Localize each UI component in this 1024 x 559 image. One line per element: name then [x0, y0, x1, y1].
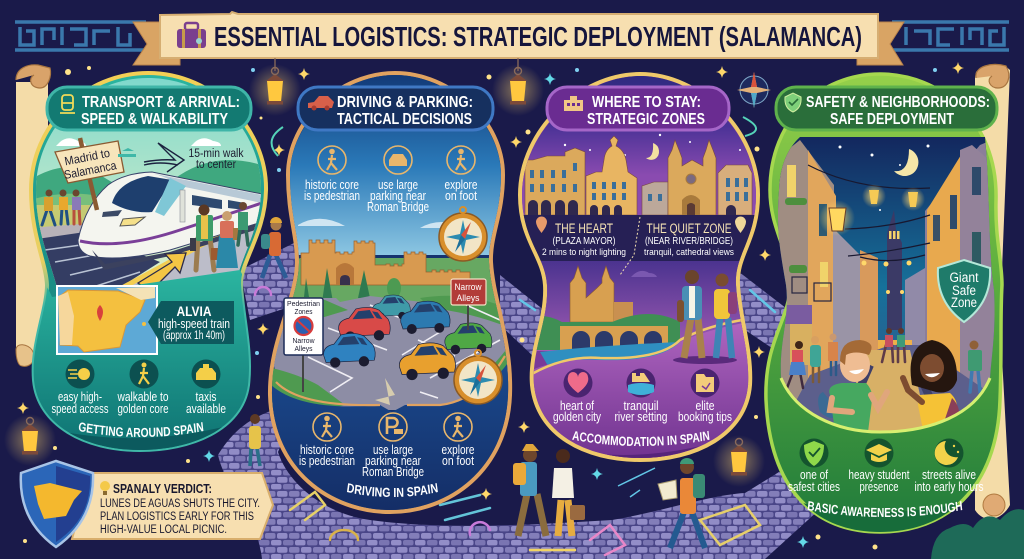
arrow and walk time [118, 143, 244, 172]
benefit labels: river setting [614, 410, 668, 424]
benefit labels: tranquil [624, 399, 658, 413]
illustration: train at station [36, 78, 261, 285]
bottom labels: historic core [300, 443, 354, 457]
sign: Pedestrian Zones: Zones [294, 309, 313, 316]
top icons [318, 146, 475, 174]
small cathedral [570, 266, 614, 322]
icon: moon and stars [934, 438, 964, 468]
icon: compass bottom [454, 350, 502, 404]
callout: Spanaly verdict [21, 461, 273, 547]
cobblestone road [218, 240, 830, 559]
benefit labels: golden city [553, 410, 602, 424]
sign: Pedestrian Zones: Narrow [292, 338, 315, 345]
verdict text: PLAN LOGISTICS EARLY FOR THIS [100, 511, 254, 523]
sign: Narrow Alleys [451, 279, 486, 330]
signpost: Madrid to Salamanca: Madrid to [63, 146, 111, 168]
arrow and walk time: to center [196, 159, 236, 171]
panel: transport and arrival [29, 71, 268, 452]
badge: Giant Safe Zone: Safe [952, 283, 976, 298]
illustration: night street [775, 137, 1000, 440]
badge: Giant Safe Zone: Giant [950, 270, 979, 285]
benefit labels: heavy student [848, 468, 910, 482]
caption: Accommodation in Spain: ACCOMMODATION IN SPAIN [572, 430, 710, 446]
caption: Getting around Spain: GETTING AROUND SPAIN [78, 422, 204, 438]
header: transport [47, 87, 251, 130]
sign: Pedestrian Zones: Pedestrian [287, 301, 320, 308]
icon: graduation cap [864, 438, 894, 468]
bottom labels [299, 443, 475, 479]
header: safety [776, 87, 997, 130]
signpost: Madrid to Salamanca [55, 138, 124, 210]
benefit labels [788, 468, 984, 494]
bush corner [931, 509, 1024, 559]
illustration: city and river [520, 76, 760, 470]
benefit labels: presence [860, 480, 899, 494]
verdict text [100, 482, 260, 536]
sign: Pedestrian Zones [284, 298, 323, 392]
top labels [304, 178, 478, 214]
benefit labels: speed access [52, 402, 108, 416]
scroll: right parchment [975, 64, 1010, 519]
travellers on the platform [42, 190, 248, 270]
scroll: left parchment [16, 65, 51, 366]
icon: fast train access [66, 360, 94, 388]
verdict text: SPANALY VERDICT: [113, 482, 212, 496]
title banner [15, 12, 1009, 65]
bottom labels: is pedestrian [299, 454, 355, 468]
benefit labels [553, 399, 732, 424]
header: where to stay [547, 87, 729, 130]
yellow arrow [138, 253, 186, 292]
zone labels: THE HEART [555, 221, 613, 236]
badge: Giant Safe Zone: Zone [951, 295, 977, 310]
benefit labels: available [186, 402, 226, 416]
benefit labels: heart of [560, 399, 594, 413]
sign: Narrow Alleys: Narrow [454, 282, 482, 293]
top labels: use large [378, 178, 418, 192]
couple chatting [818, 340, 959, 430]
top labels: on foot [445, 189, 477, 203]
zone labels: 2 mins to night lighting [542, 247, 626, 258]
benefit labels: golden core [118, 402, 169, 416]
benefit labels: walkable to [117, 390, 169, 404]
icon: taxi [192, 360, 220, 388]
panel: driving and parking [268, 71, 512, 514]
foreground travellers [513, 444, 705, 548]
lanterns [4, 58, 765, 487]
sign: Narrow Alleys: Alleys [456, 293, 480, 304]
benefit labels [52, 390, 226, 416]
map of Spain [57, 286, 157, 354]
traveller on road: walker near panel 1 [261, 217, 286, 278]
sign: Pedestrian Zones: Alleys [294, 346, 313, 353]
compass rose [737, 72, 771, 108]
icon: shield with Spain [21, 461, 93, 547]
verdict text: LUNES DE AGUAS SHUTS THE CITY. [100, 498, 260, 510]
left arcade building [525, 148, 585, 215]
header: driving: TACTICAL DECISIONS [337, 111, 472, 128]
callout: Alvia train: high-speed train [158, 317, 230, 331]
top labels: Roman Bridge [367, 200, 429, 214]
icon: light bulb [100, 481, 110, 495]
top labels: historic core [305, 178, 359, 192]
panel: safety and neighborhoods [764, 72, 1004, 534]
caption: Basic awareness is enough: BASIC AWARENESS IS ENOUGH [808, 501, 962, 517]
callout: Alvia train: (approx 1h 40m) [163, 330, 225, 342]
icon: safe shield [800, 438, 828, 468]
zone labels: (PLAZA MAYOR) [552, 236, 616, 247]
benefit labels: safest cities [788, 480, 840, 494]
header: safety: SAFE DEPLOYMENT [830, 111, 954, 128]
callout: Alvia train [148, 301, 234, 344]
benefit labels: booking tips [678, 410, 732, 424]
header: driving [298, 87, 493, 130]
benefit labels: taxis [196, 390, 216, 404]
top labels: is pedestrian [304, 189, 360, 203]
signpost: Madrid to Salamanca: Salamanca [63, 158, 118, 182]
header: transport: TRANSPORT & ARRIVAL: [82, 94, 240, 111]
benefit labels: one of [800, 468, 828, 482]
badge: Giant Safe Zone [938, 260, 990, 322]
top labels: parking near [370, 189, 426, 203]
icon: walking person [130, 360, 158, 388]
arrow and walk time: 15-min walk [188, 148, 244, 160]
caption: Driving in Spain: DRIVING IN SPAIN [346, 483, 438, 497]
bottom icons [313, 413, 472, 441]
bottom labels: use large [373, 443, 413, 457]
illustration: castle and parking [265, 75, 510, 520]
zone labels [536, 216, 746, 275]
benefit labels: streets alive [922, 468, 976, 482]
bottom labels: explore [442, 443, 475, 457]
header: where to stay: STRATEGIC ZONES [587, 111, 705, 128]
icon: river castle [626, 368, 656, 398]
panel: where to stay [518, 72, 760, 462]
icon: heart [564, 368, 592, 398]
traveller on road: near panel 2 bottom [249, 414, 261, 466]
couple at the river [673, 270, 737, 364]
callout: Alvia train: ALVIA [176, 303, 212, 319]
benefit labels: easy high- [58, 390, 102, 404]
caption: Basic awareness is enough [803, 501, 962, 532]
teal lower body [30, 270, 255, 460]
zone labels: THE QUIET ZONE [646, 221, 732, 236]
zone labels: (NEAR RIVER/BRIDGE) [645, 236, 733, 247]
icon: compass top [439, 207, 487, 261]
bottom labels: parking near [365, 454, 421, 468]
icon: suitcase [177, 23, 206, 48]
background walkers [787, 328, 982, 392]
benefit labels: elite [696, 399, 715, 413]
bottom labels: on foot [442, 454, 474, 468]
header: driving: DRIVING & PARKING: [337, 94, 473, 111]
icon: booking folder [690, 368, 720, 398]
zone labels: tranquil, cathedral views [644, 247, 734, 258]
verdict text: HIGH-VALUE LOCAL PICNIC. [100, 524, 227, 536]
bottom labels: Roman Bridge [362, 465, 424, 479]
benefit labels: into early hours [914, 480, 984, 494]
header: where to stay: WHERE TO STAY: [592, 94, 701, 111]
top labels: explore [444, 178, 478, 192]
header: transport: SPEED & WALKABILITY [81, 111, 228, 128]
